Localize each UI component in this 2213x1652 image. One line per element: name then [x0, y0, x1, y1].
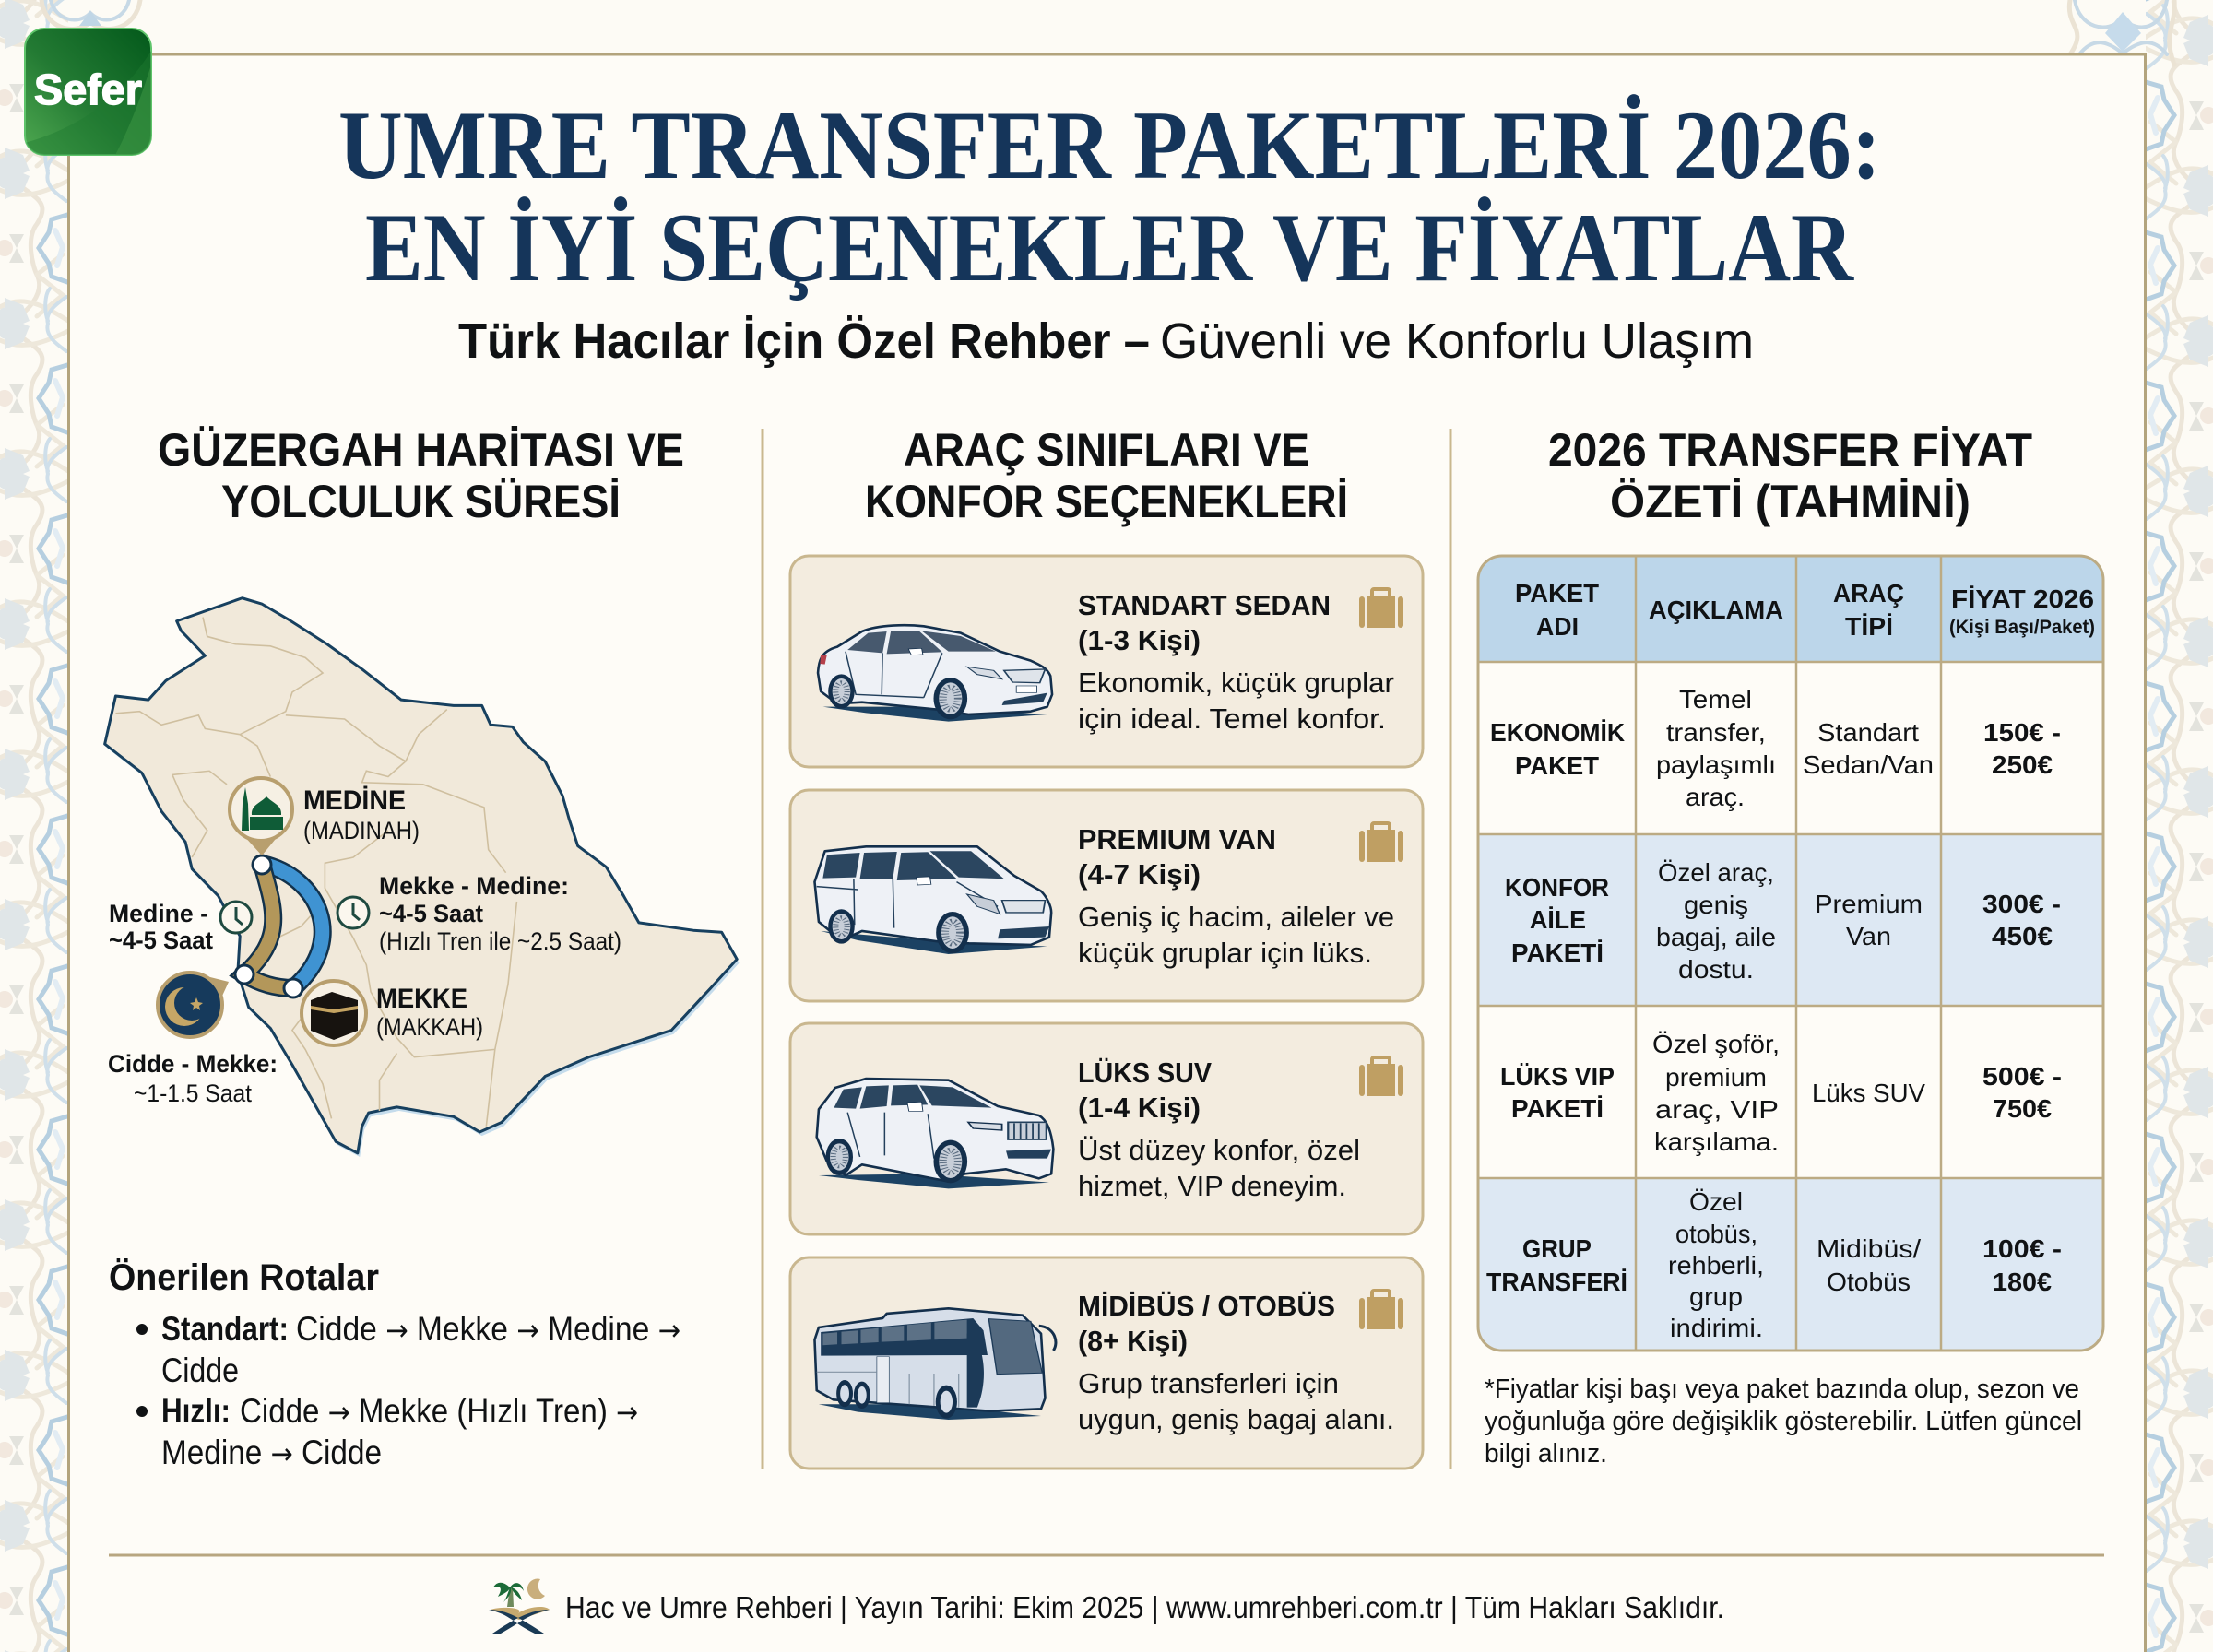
row: Ekonomik Paket	[1490, 685, 2061, 811]
table header: FİYAT 2026	[1951, 584, 2094, 613]
label: Medine	[303, 785, 420, 844]
icon: clock left	[220, 902, 252, 933]
row: Ekonomik Paket: araç.	[1686, 783, 1745, 811]
text: SUV: LÜKS SUV	[1078, 1056, 1212, 1089]
table header: (Kişi Başı/Paket)	[1949, 617, 2095, 638]
heading: vehicle classes: ARAÇ SINIFLARI VE	[904, 424, 1309, 476]
row: Luks VIP Paketi: 750€	[1993, 1094, 2052, 1123]
table header: TİPİ	[1845, 612, 1893, 641]
recommended routes: Standart:	[161, 1310, 289, 1348]
row: Luks VIP Paketi: Lüks SUV	[1812, 1079, 1925, 1107]
row: Konfor Aile Paketi: Özel araç,	[1658, 858, 1774, 887]
label: Medine - time: ~4-5 Saat	[109, 926, 213, 954]
row: Grup Transferi	[1486, 1187, 2062, 1342]
table header	[1515, 579, 2095, 641]
heading: price summary: 2026 TRANSFER FİYAT	[1548, 424, 2032, 476]
ornamental border: top corners	[41, 0, 2174, 65]
row: Grup Transferi: TRANSFERİ	[1486, 1268, 1627, 1296]
text: bus: (8+ Kişi)	[1078, 1325, 1188, 1357]
text: bus: uygun, geniş bagaj alanı.	[1078, 1403, 1394, 1435]
row: Luks VIP Paketi: premium	[1665, 1063, 1767, 1092]
card: Luks SUV	[790, 1023, 1423, 1234]
row: Grup Transferi: Özel	[1689, 1187, 1743, 1216]
row: Luks VIP Paketi: araç, VIP	[1655, 1095, 1779, 1124]
row: Ekonomik Paket: EKONOMİK	[1490, 718, 1625, 747]
row: Ekonomik Paket: Standart	[1817, 718, 1919, 747]
label: Mekke - Medine time: ~4-5 Saat	[379, 900, 483, 927]
table header: AÇIKLAMA	[1649, 596, 1783, 624]
text: van	[1078, 823, 1394, 969]
subtitle	[458, 313, 1754, 369]
label: Medine - time	[109, 900, 213, 954]
heading: route map: GÜZERGAH HARİTASI VE	[158, 424, 684, 476]
text: SUV: (1-4 Kişi)	[1078, 1092, 1201, 1124]
label: Cidde - Mekke time	[108, 1050, 278, 1107]
row: Konfor Aile Paketi: Premium	[1815, 890, 1923, 918]
label: Medine: (MADINAH)	[303, 817, 420, 844]
card: Standart Sedan	[790, 556, 1423, 767]
text: SUV	[1078, 1056, 1360, 1202]
recommended routes	[109, 1257, 680, 1471]
label: Medine - time: Medine -	[109, 900, 208, 927]
vehicle: sedan	[818, 625, 1052, 722]
row: Ekonomik Paket: Temel	[1679, 685, 1752, 714]
label: Cidde - Mekke time: Cidde - Mekke:	[108, 1050, 278, 1078]
text: sedan: (1-3 Kişi)	[1078, 624, 1201, 656]
text: sedan: için ideal. Temel konfor.	[1078, 702, 1386, 735]
text: SUV: Üst düzey konfor, özel	[1078, 1134, 1360, 1166]
heading: price summary	[1548, 424, 2032, 527]
map outline	[105, 598, 740, 1157]
footnote: *Fiyatlar kişi başı veya paket bazında olup, sezon ve	[1485, 1375, 2079, 1404]
text: van: küçük gruplar için lüks.	[1078, 937, 1372, 969]
row: Ekonomik Paket: paylaşımlı	[1656, 750, 1776, 779]
row: Konfor Aile Paketi: AİLE	[1530, 905, 1586, 934]
pin: Cidde crescent	[158, 973, 229, 1037]
row: Grup Transferi: Otobüs	[1827, 1268, 1911, 1296]
text: sedan	[1078, 589, 1394, 735]
heading: vehicle classes	[865, 424, 1348, 527]
pin: Mekke Kaaba	[302, 981, 366, 1045]
row: Ekonomik Paket: transfer,	[1666, 718, 1766, 747]
icon: suitcase	[1359, 1289, 1403, 1329]
label: Mekke	[376, 984, 483, 1041]
row: Konfor Aile Paketi: Van	[1846, 922, 1891, 950]
row: Konfor Aile Paketi: geniş	[1684, 891, 1748, 919]
icon: clock right	[337, 897, 369, 928]
footer logo	[489, 1579, 550, 1634]
label: Mekke - Medine time: (Hızlı Tren ile ~2.5 Saat)	[379, 927, 621, 955]
label: Cidde - Mekke time: ~1-1.5 Saat	[134, 1080, 252, 1107]
card: Midibus / Otobus	[790, 1257, 1423, 1469]
row: Luks VIP Paketi: LÜKS VIP	[1500, 1062, 1615, 1091]
subtitle: Türk Hacılar İçin Özel Rehber –	[458, 313, 1150, 369]
text: bus: Grup transferleri için	[1078, 1367, 1339, 1399]
text: SUV: hizmet, VIP deneyim.	[1078, 1170, 1346, 1202]
route nodes	[235, 856, 302, 997]
table header: ADI	[1536, 612, 1579, 641]
recommended routes: Cidde	[161, 1351, 239, 1389]
row: Konfor Aile Paketi: bagaj, aile	[1656, 923, 1776, 951]
footnote: yoğunluğa göre değişiklik gösterebilir. Lütfen güncel	[1485, 1407, 2082, 1436]
table header: PAKET	[1515, 579, 1599, 608]
row: Konfor Aile Paketi: KONFOR	[1505, 873, 1609, 902]
vehicle: van	[814, 846, 1051, 954]
ornamental border: right	[2146, 0, 2213, 1652]
recommended routes: Medine → Cidde	[161, 1434, 382, 1471]
row: Ekonomik Paket: Sedan/Van	[1803, 750, 1934, 779]
recommended routes: Cidde → Mekke (Hızlı Tren) →	[240, 1392, 638, 1430]
title: EN İYİ SEÇENEKLER VE FİYATLAR	[365, 194, 1854, 301]
label: Medine: MEDİNE	[303, 785, 406, 816]
row: Luks VIP Paketi: PAKETİ	[1511, 1094, 1604, 1123]
row: Konfor Aile Paketi: dostu.	[1678, 955, 1754, 984]
icon: suitcase	[1359, 587, 1403, 628]
route: Medine to Mekke, blue	[262, 864, 323, 988]
row: Grup Transferi: rehberli,	[1668, 1251, 1764, 1280]
map: Saudi Arabia with routes	[105, 598, 740, 1157]
text: sedan: Ekonomik, küçük gruplar	[1078, 667, 1394, 699]
text: bus: MİDİBÜS / OTOBÜS	[1078, 1290, 1335, 1322]
title	[338, 91, 1881, 301]
label: Mekke - Medine time: Mekke - Medine:	[379, 872, 569, 900]
route: Medine to Cidde to Mekke, gold	[244, 864, 293, 988]
text: bus	[1078, 1290, 1394, 1435]
row: Grup Transferi: grup	[1689, 1282, 1743, 1311]
label: Mekke: MEKKE	[376, 984, 467, 1014]
row: Konfor Aile Paketi: 450€	[1992, 922, 2053, 950]
heading: route map	[158, 424, 684, 527]
row: Ekonomik Paket: 250€	[1992, 750, 2053, 779]
row: Luks VIP Paketi: Özel şoför,	[1652, 1030, 1780, 1058]
subtitle: Güvenli ve Konforlu Ulaşım	[1160, 313, 1754, 369]
pin: Medine mosque	[230, 778, 292, 856]
footer text: Hac ve Umre Rehberi | Yayın Tarihi: Ekim 2025 | www.umrehberi.com.tr | Tüm Hakları Saklıdır.	[565, 1590, 1724, 1624]
vehicle: bus	[814, 1308, 1056, 1420]
footnote: bilgi alınız.	[1485, 1439, 1607, 1469]
row: Grup Transferi: Midibüs/	[1817, 1234, 1921, 1263]
vehicle: SUV	[817, 1079, 1053, 1188]
card: Premium Van	[790, 790, 1423, 1001]
row: Grup Transferi: GRUP	[1522, 1234, 1592, 1263]
heading: price summary: ÖZETİ (TAHMİNİ)	[1610, 476, 1970, 527]
label: Mekke: (MAKKAH)	[376, 1013, 483, 1041]
row: Grup Transferi: indirimi.	[1670, 1314, 1763, 1342]
title: UMRE TRANSFER PAKETLERİ 2026:	[338, 91, 1881, 199]
row: Konfor Aile Paketi	[1505, 858, 2061, 984]
row: Ekonomik Paket: 150€ -	[1983, 718, 2061, 747]
row: Ekonomik Paket: PAKET	[1515, 751, 1599, 780]
text: van: Geniş iç hacim, aileler ve	[1078, 901, 1394, 933]
row: Grup Transferi: otobüs,	[1675, 1220, 1757, 1248]
row: Luks VIP Paketi	[1500, 1030, 2062, 1156]
icon: suitcase	[1359, 1056, 1403, 1096]
heading: route map: YOLCULUK SÜRESİ	[221, 476, 621, 527]
row: Luks VIP Paketi: 500€ -	[1982, 1062, 2062, 1091]
icon: suitcase	[1359, 821, 1403, 862]
table header: ARAÇ	[1833, 579, 1904, 608]
label: Mekke - Medine time	[379, 872, 621, 955]
row: Luks VIP Paketi: karşılama.	[1654, 1127, 1779, 1156]
logo badge: Sefer: Sefer	[34, 65, 142, 113]
recommended routes: Önerilen Rotalar	[109, 1257, 379, 1298]
ornamental border: left	[0, 0, 68, 1652]
text: sedan: STANDART SEDAN	[1078, 589, 1331, 621]
heading: vehicle classes: KONFOR SEÇENEKLERİ	[865, 476, 1348, 527]
row: Konfor Aile Paketi: PAKETİ	[1511, 938, 1604, 967]
logo badge: Sefer	[25, 29, 151, 155]
footnote	[1485, 1375, 2082, 1469]
recommended routes: Hızlı:	[161, 1392, 231, 1430]
text: van: (4-7 Kişi)	[1078, 858, 1201, 891]
text: van: PREMIUM VAN	[1078, 823, 1276, 856]
recommended routes: Cidde → Mekke → Medine →	[296, 1310, 680, 1348]
row: Konfor Aile Paketi: 300€ -	[1982, 890, 2061, 918]
price table	[1478, 556, 2103, 1351]
row: Grup Transferi: 180€	[1993, 1268, 2052, 1296]
row: Grup Transferi: 100€ -	[1982, 1234, 2062, 1263]
table backgrounds and grid	[1478, 556, 2103, 1351]
